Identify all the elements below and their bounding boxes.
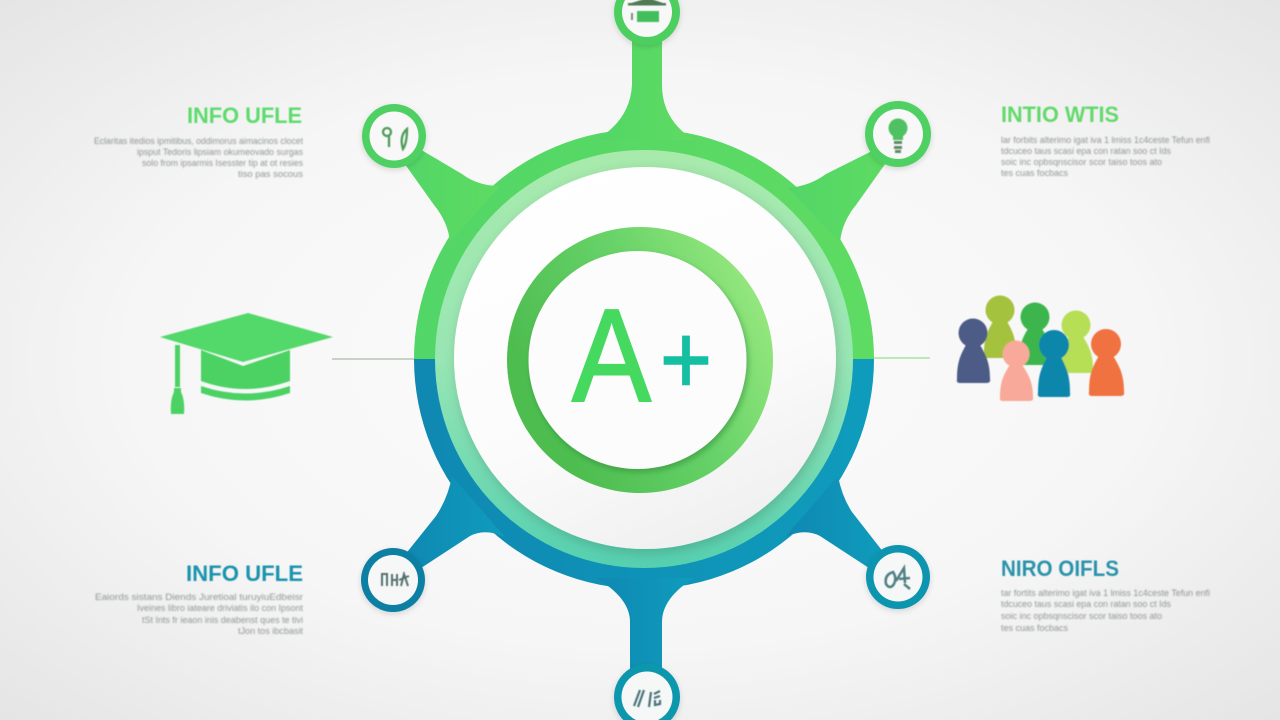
text block: upper left: tiso pas socous [238, 169, 304, 179]
heading: upper right: INTIO WTIS [1001, 102, 1119, 127]
text block: lower right: tar fortits alterimo igat iva 1 lmiss 1c4ceste Tefun enfi [1001, 588, 1210, 598]
cap band [201, 386, 290, 400]
node: upper right [865, 101, 931, 167]
text block: lower right [1001, 588, 1210, 633]
text block: lower left [95, 592, 303, 636]
blue lower half with arms [408, 359, 882, 669]
cap body [201, 350, 290, 389]
icon: small cap [628, 0, 666, 22]
text block: upper left: solo from ipsarmis Isesster tip at ot resies [142, 158, 303, 168]
plus sign: + [660, 304, 712, 414]
icon: two marks [383, 128, 407, 149]
person: olive [984, 296, 1016, 358]
green upper half with arms [406, 42, 885, 359]
node: bottom [614, 664, 680, 720]
heading: lower right: NIRO OIFLS [1001, 556, 1119, 581]
text block: upper right [1001, 135, 1210, 178]
text block: upper right: lar forbits alterimo igat iva 1 lmiss 1c4ceste Tefun enfi [1001, 135, 1210, 145]
tassel cord [175, 345, 180, 387]
inner green ring [507, 227, 773, 493]
inner white disc [528, 251, 746, 469]
node: lower left [361, 548, 425, 612]
text block: lower left: Iveines libro iateare driviatis ilo con Ipsont [137, 603, 303, 613]
text block: lower right: tdcuceo taus scasi epa con ratan soo ct Ids [1001, 599, 1171, 609]
tassel [171, 388, 184, 414]
text block: upper right: tdcuceo taus scasi epa con ratan soo ct Ids [1001, 146, 1171, 156]
text block: lower left: Eaiords sistans Diends Juretioal turuyiuEdbeisr [95, 592, 303, 602]
icon: group of people [957, 296, 1124, 401]
person: orange [1089, 329, 1124, 396]
icon: light bulb [888, 118, 908, 153]
node: lower right [866, 545, 930, 609]
icon: scribble marks [886, 568, 910, 589]
cap board [160, 313, 333, 362]
icon: graduation cap [160, 313, 333, 414]
light ring [435, 150, 853, 568]
text block: lower left: tSt Ints fr ieaon inis deabenst ques te tivi [142, 615, 303, 625]
grade letter A: A [572, 282, 651, 429]
person: navy [957, 318, 990, 383]
person: green [1019, 302, 1051, 365]
white disc [454, 167, 836, 549]
text block: upper right: tes cuas focbacs [1001, 168, 1068, 178]
text block: lower right: tes cuas focbacs [1001, 623, 1068, 633]
text block: upper left [94, 136, 304, 179]
text block: lower left: tJon tos ibcbasit [238, 626, 303, 636]
person: blue [1038, 330, 1070, 397]
text block: upper right: soic inc opbsqnscisor scor taiso toos ato [1001, 157, 1162, 167]
text block: lower right: soic inc opbsqnscisor scor taiso toos ato [1001, 611, 1162, 621]
heading: lower left: INFO UFLE [186, 561, 303, 586]
icon: slanted marks [634, 690, 660, 707]
heading: upper left: INFO UFLE [187, 103, 302, 128]
person: lime [1059, 310, 1093, 373]
central hub [402, 35, 888, 675]
connector line: left [332, 358, 416, 360]
text block: upper left: Eclaritas itedios ipmitibus, oddimorus aimacinos clocet [94, 136, 303, 146]
node: upper left [362, 104, 426, 168]
text block: upper left: ipsput Tedoris lipsiam okumeovado surgas [137, 147, 303, 157]
node: top (cap) [614, 0, 680, 45]
icon: glyph marks [381, 574, 409, 586]
connector line: right [872, 357, 930, 359]
person: salmon [1000, 340, 1033, 401]
